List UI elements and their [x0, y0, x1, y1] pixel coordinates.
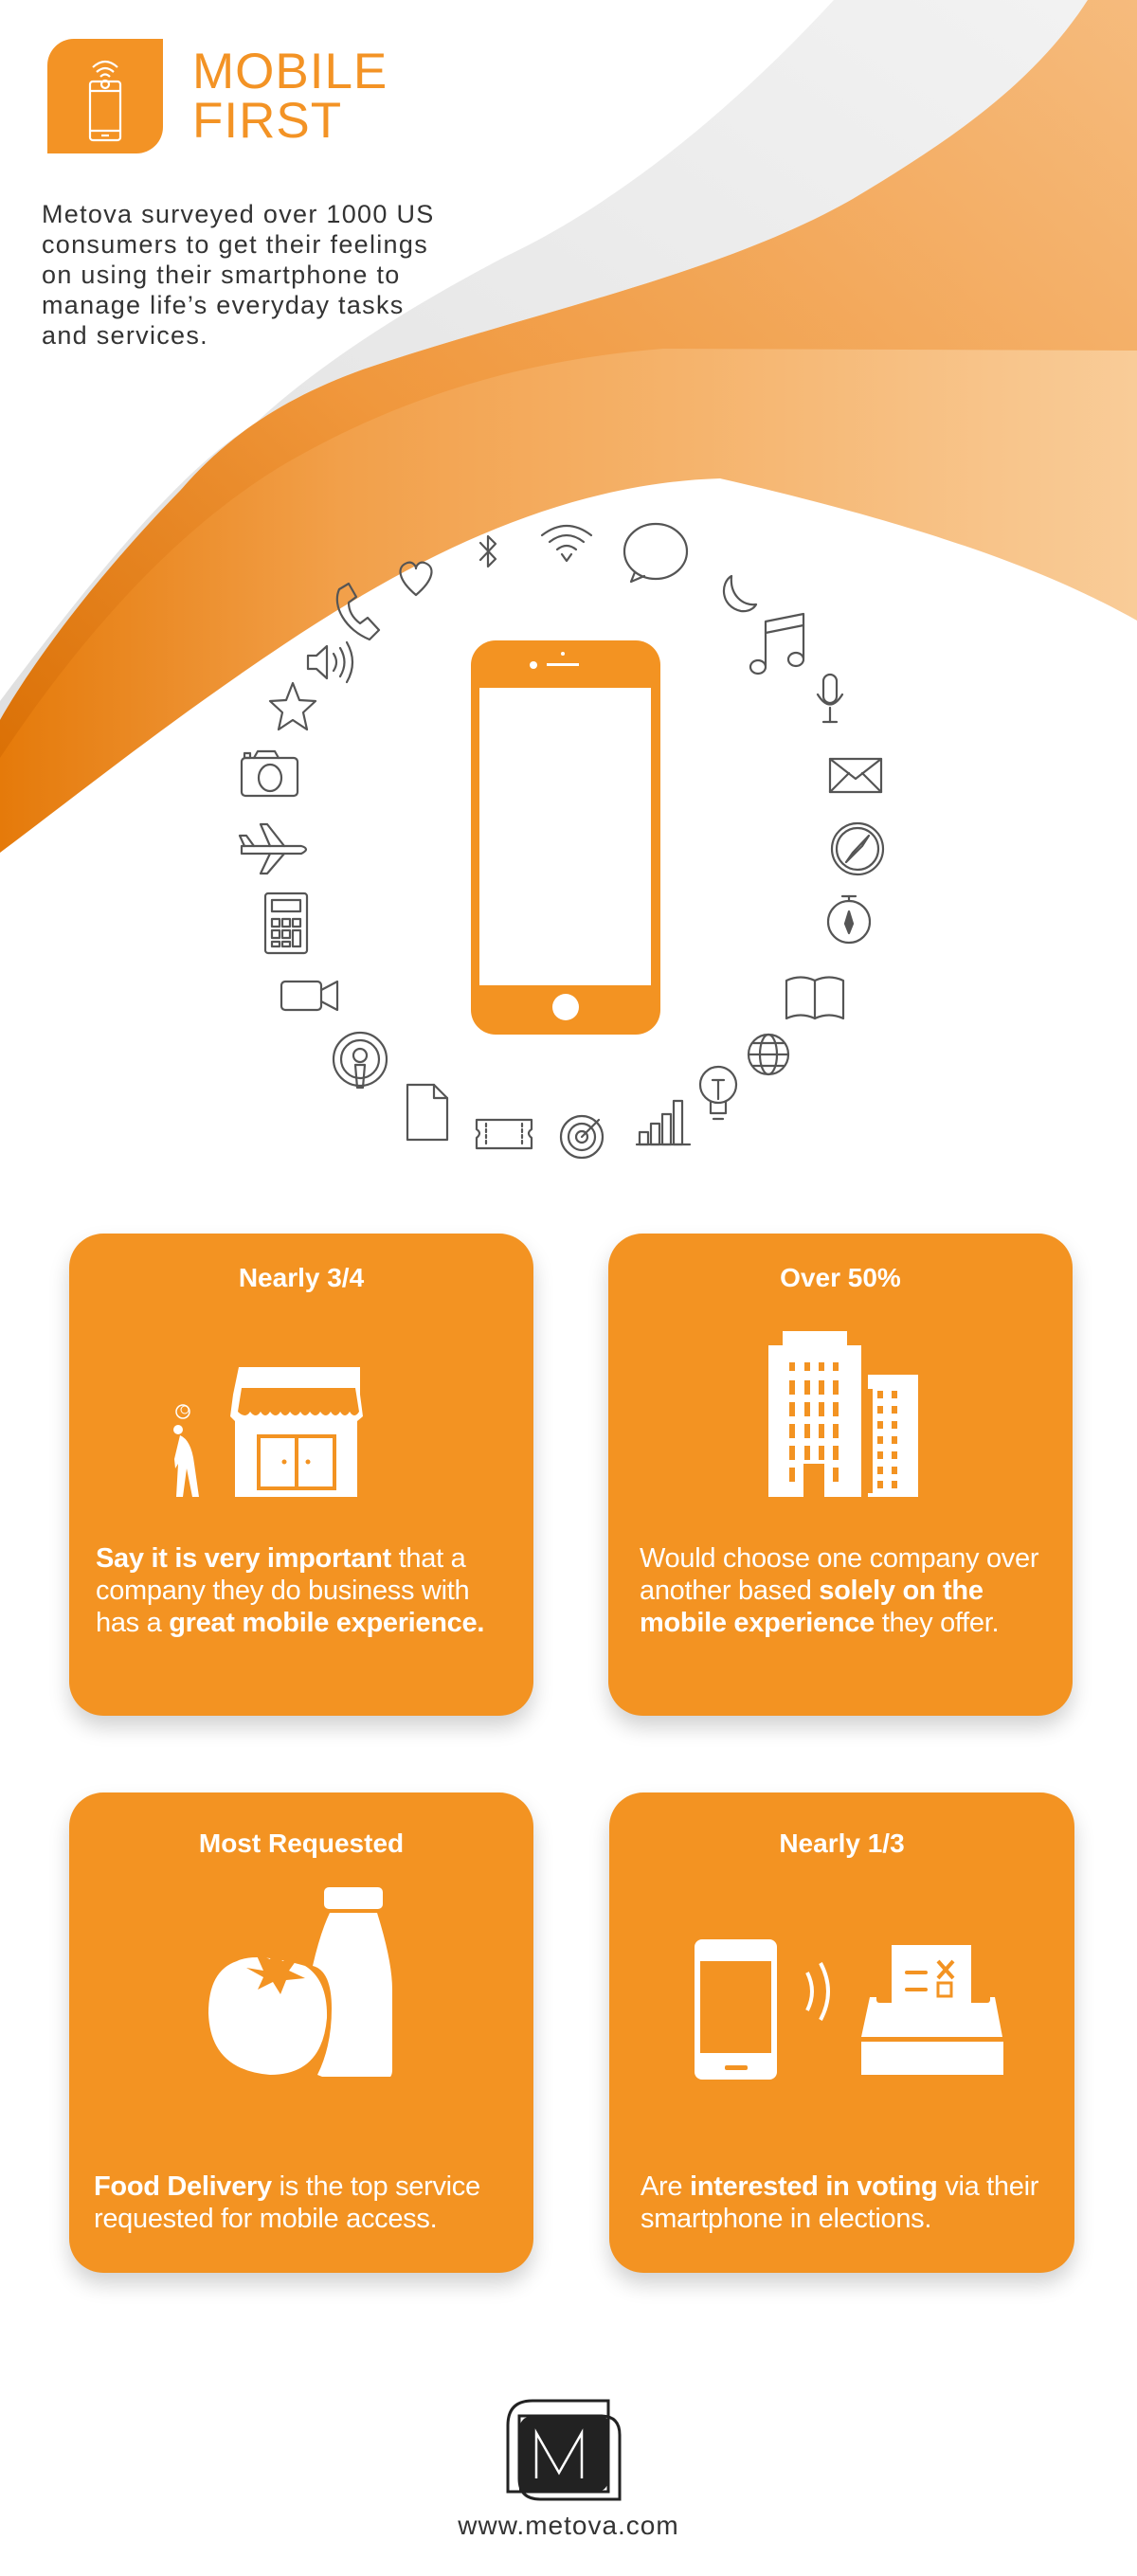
card text [641, 2171, 1038, 2234]
icon: tomato and bottle [208, 1887, 392, 2077]
card text: Would choose one company over [640, 1543, 1038, 1574]
title: FIRST [192, 93, 342, 149]
icon: bluetooth [480, 536, 496, 567]
title [192, 44, 388, 149]
intro paragraph: Metova surveyed over 1000 US [42, 200, 435, 228]
icon: mail [830, 759, 881, 792]
icon: bar chart [637, 1101, 690, 1144]
icon: globe [749, 1035, 788, 1074]
icon: ticket [477, 1120, 532, 1148]
intro paragraph [42, 200, 435, 350]
card title: Nearly 1/3 [779, 1828, 905, 1858]
icon: moon [724, 576, 756, 611]
icon: frustrated person and store [173, 1367, 363, 1497]
icon: phone to ballot box [695, 1939, 1003, 2080]
icon: book [786, 978, 843, 1018]
icon: stopwatch [828, 896, 870, 943]
icon: calculator [265, 893, 307, 953]
icon: compass [832, 823, 883, 874]
icon: chat bubble [624, 524, 687, 582]
icon: airplane [240, 824, 306, 874]
card: over 50% [608, 1234, 1073, 1716]
icon: light bulb [700, 1067, 736, 1119]
icon: video camera [281, 982, 337, 1010]
footer logo [506, 2399, 622, 2501]
card text [94, 2171, 480, 2234]
card text: Say it is very important that a [96, 1543, 465, 1574]
card title: Most Requested [199, 1828, 404, 1858]
card: nearly 3/4 [69, 1234, 533, 1716]
icon: music note [750, 614, 803, 674]
app icons ring [239, 523, 885, 1160]
icon: target [561, 1116, 603, 1158]
icon: podcast [334, 1033, 387, 1088]
intro paragraph: on using their smartphone to [42, 261, 401, 289]
icon: speaker [308, 642, 352, 682]
website url: www.metova.com [458, 2511, 679, 2540]
icon: heart [401, 563, 431, 595]
card text: company they do business with [96, 1576, 469, 1606]
icon: document [407, 1085, 447, 1140]
card text [96, 1543, 484, 1638]
card text: has a great mobile experience. [96, 1608, 484, 1638]
card text [640, 1543, 1038, 1638]
card text: requested for mobile access. [94, 2204, 437, 2234]
intro paragraph: and services. [42, 321, 208, 350]
icon: office buildings [768, 1331, 918, 1497]
card title: Over 50% [780, 1263, 901, 1292]
icon: phone handset [337, 584, 379, 639]
intro paragraph: consumers to get their feelings [42, 230, 428, 259]
background swoosh [0, 0, 1137, 853]
intro paragraph: manage life’s everyday tasks [42, 291, 405, 319]
icon: microphone [818, 675, 842, 722]
logo box: mobile icon [47, 39, 163, 153]
title: MOBILE [192, 44, 388, 99]
icon: camera [242, 751, 298, 796]
card text: Food Delivery is the top service [94, 2171, 480, 2202]
card text: smartphone in elections. [641, 2204, 931, 2234]
card: most requested [69, 1792, 533, 2273]
central phone [471, 640, 660, 1035]
card: nearly 1/3 [609, 1792, 1074, 2273]
icon: wifi [542, 526, 591, 561]
card text: mobile experience they offer. [640, 1608, 999, 1638]
card text: another based solely on the [640, 1576, 984, 1606]
icon: star [270, 683, 316, 730]
card text: Are interested in voting via their [641, 2171, 1038, 2202]
card title: Nearly 3/4 [239, 1263, 364, 1292]
